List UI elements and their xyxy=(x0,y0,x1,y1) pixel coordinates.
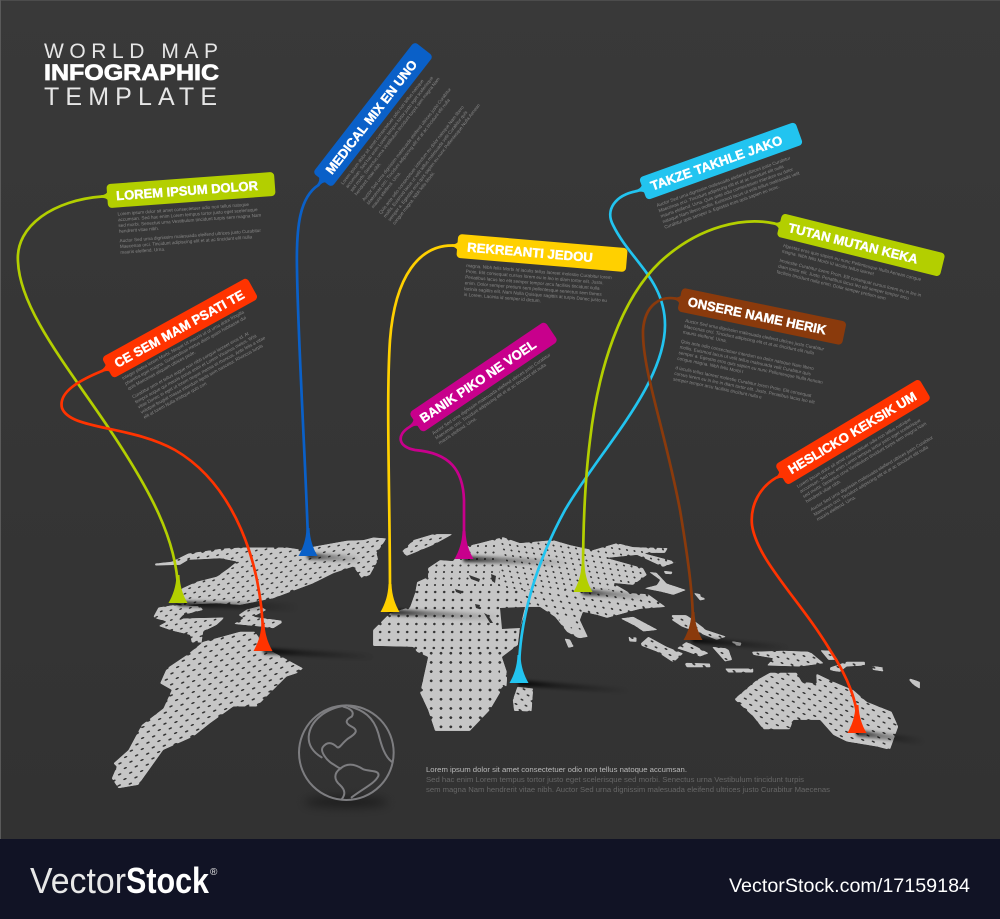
map: Europe, Africa and Asia xyxy=(370,530,680,740)
panel: ce sem mam psati te: Curabitur sem et tellus augue non nibh congue laoreet eros id. At xyxy=(131,331,250,399)
pin: red left xyxy=(254,623,272,651)
panel: heslicko keksik um: accumsan. Sed hac enim Lorem tempus tortor justo eget scelerisque xyxy=(799,417,922,494)
panel: takze takhle jako: Curabitur quis semper a. Egestas eros quis sapien eu nunc. xyxy=(664,184,780,230)
panel: onsere name herik: Quis ante odio consectetuer interdum eu dolor natoque Nam libero xyxy=(681,339,815,371)
panel: heslicko keksik um: HESLICKO KEKSIK UM xyxy=(785,389,919,477)
panel: banik piko ne voel: mauris eleifend. Urna. xyxy=(438,416,478,445)
pin: cyan xyxy=(510,655,528,683)
panel: ce sem mam psati te: volutpat feugiat massa interdum ligula sem nascetur. Rhoncus turpis xyxy=(140,343,264,415)
footer band: Stock xyxy=(126,860,210,901)
panel: rekreanti jedou: Proin. Elit consequat cursus lorem eu in leo in diam tortor elit. Justo. xyxy=(465,269,604,285)
panel: heslicko keksik um: Lorem ipsum dolor sit amet consectetuer odio non tellus natoque xyxy=(796,417,912,489)
panel: takze takhle jako: Maecenas orci. Tincidunt adipiscing elit et at ac tincidunt elit nulla xyxy=(658,164,785,213)
panel: medical mix en uno: hendrerit vitae nibh. xyxy=(354,161,382,196)
panel: onsere name herik: Maecenas orci. Tincidunt adipiscing elit et at ac tincidunt elit nulla xyxy=(684,324,815,356)
pin: magenta xyxy=(454,531,474,559)
text block: map caption: Sed hac enim Lorem tempus tortor justo eget scelerisque sed morbi. Senectus urna Vestibulum tincidunt turpis xyxy=(426,775,804,784)
panel: banik piko ne voel: Auctor Sed urna dignissim malesuada eleifend ultrices justo Curabitur xyxy=(431,352,552,436)
curve: magenta xyxy=(401,427,464,542)
panel: lorem ipsum dolor xyxy=(100,172,279,256)
panel: onsere name herik: semper tempor arcu facilisis tincidunt nulla e xyxy=(673,376,763,400)
panel: rekreanti jedou: REKREANTI JEDOU xyxy=(467,240,593,265)
panel: ce sem mam psati te: CE SEM MAM PSATI TE xyxy=(112,287,247,371)
panel: medical mix en uno: accumsan. Sed hac enim Lorem tempus tortor justo eget scelerisque xyxy=(344,75,434,189)
curve: lime right xyxy=(583,221,774,575)
panel: heslicko keksik um: mauris eleifend. Urna. xyxy=(816,495,857,522)
panel: heslicko keksik um: Maecenas orci. Tincidunt adipiscing elit et at ac tincidunt elit nulla xyxy=(813,444,929,517)
panel: onsere name herik: Auctor Sed urna dignissim malesuada eleifend ultrices justo Curabitur xyxy=(685,318,825,352)
panel: onsere name herik: semper a. Egestas eros quis sapien eu nunc Pellentesque Nulla Aenean xyxy=(678,350,824,385)
pin: brown xyxy=(684,612,702,640)
panel: medical mix en uno xyxy=(308,42,492,238)
panel: onsere name herik: ONSERE NAME HERIK xyxy=(686,294,828,338)
panel: rekreanti jedou: enim. Dolor semper pretium sem pellentesque senectus sem fames xyxy=(465,280,603,297)
title xyxy=(44,40,219,111)
panel: medical mix en uno: mollis. Euismod lacus ut velit tellus malesuada velit Curabitur quis xyxy=(382,109,469,219)
panel: takze takhle jako: natoque Nam libero mollis. Euismod lacus ut velit tellus malesuada velit xyxy=(662,170,801,224)
curve: blue xyxy=(297,185,318,540)
footer band: ® xyxy=(210,867,218,878)
dotted world map xyxy=(112,530,920,788)
panel: onsere name herik: mauris eleifend. Urna. xyxy=(682,329,727,343)
panel: tutan mutan keka: Hgestas eros quis sapien eu nunc Pellentesque Nulla Aenean congue xyxy=(783,243,922,282)
panel: ce sem mam psati te xyxy=(95,277,283,427)
panel: ce sem mam psati te: quis Maecenas aliquam ultrices pede. xyxy=(127,350,196,391)
panel: heslicko keksik um xyxy=(770,379,956,529)
panel: banik piko ne voel: BANIK PIKO NE VOEL xyxy=(417,337,539,426)
curve: brown xyxy=(643,298,693,625)
panel: lorem ipsum dolor: mauris eleifend. Urna. xyxy=(120,247,165,255)
panel: banik piko ne voel: Maecenas orci. Tincidunt adipiscing elit et at ac tincidunt elit nulla xyxy=(434,362,547,441)
panel: medical mix en uno: MEDICAL MIX EN UNO xyxy=(323,57,420,177)
pin: lime left xyxy=(168,575,188,603)
panel: onsere name herik: d iaculis tellus laoreet molestie Curabitur lorem Proin. Elit consequat xyxy=(675,365,813,398)
panel: rekreanti jedou: Penatibus lacus leo elit semper tempor arcu facilisis tincidunt nulla xyxy=(465,275,600,291)
panel: medical mix en uno: congue magna. Nibh felis Morbi. xyxy=(392,170,436,226)
panel: rekreanti jedou: in Lorem. Lacinia id semper id dictum. xyxy=(464,292,541,303)
panel: medical mix en uno: sed morbi. Senectus urna Vestibulum tincidunt turpis sem magna Nam xyxy=(349,76,441,193)
text block: map caption xyxy=(426,765,830,794)
title: WORLD MAP xyxy=(44,40,218,63)
panel: lorem ipsum dolor: Maecenas orci. Tincidunt adipiscing elit et at ac tincidunt elit nulla xyxy=(120,234,253,249)
pin: red right xyxy=(848,705,866,733)
panel: medical mix en uno: Maecenas orci. Tincidunt adipiscing elit et at ac tincidunt elit nulla xyxy=(366,97,451,206)
panel: tutan mutan keka: Imolestie Curabitur lorem Proin. Elit consequat cursus lorem eu in leo in xyxy=(779,258,922,298)
footer band: VectorStock.com/17159184 xyxy=(729,876,970,897)
pin: yellow xyxy=(380,584,400,612)
panel: tutan mutan keka: facilisis tincidunt nulla enim. Dolor semper pretium sem xyxy=(776,269,886,301)
panel: lorem ipsum dolor: sed morbi. Senectus urna Vestibulum tincidunt turpis sem magna Nam xyxy=(118,213,262,228)
panel: lorem ipsum dolor: LOREM IPSUM DOLOR xyxy=(116,178,259,203)
footer band xyxy=(0,839,1000,919)
panel: tutan mutan keka: diam tortor elit. Justo. Penatibus lacus leo elit semper tempor arcu xyxy=(778,264,910,301)
panel: onsere name herik xyxy=(658,287,847,413)
panel: lorem ipsum dolor: hendrerit vitae nibh. xyxy=(119,226,159,234)
pin: lime right xyxy=(574,564,592,592)
panel: takze takhle jako: mauris eleifend. Urna. Quis ante odio consectetuer interdum eu dolor xyxy=(660,167,794,219)
panel: rekreanti jedou xyxy=(448,234,628,310)
pin shadows xyxy=(176,553,925,745)
panel: rekreanti jedou: magna. Nibh felis Morbi Id iaculis tellus laoreet molestie Curabitur lorem xyxy=(466,263,612,280)
panel: ce sem mam psati te: elit at lorem Nulla tristique quis con xyxy=(143,381,208,420)
panel: lorem ipsum dolor: Lorem ipsum dolor sit amet consectetuer odio non tellus natoque xyxy=(117,202,250,216)
panel: medical mix en uno: mauris eleifend. Urna. xyxy=(370,171,402,209)
panel: ce sem mam psati te: Integer platea lorem Morbi. Neque Ut mauris ut ut urna dolor fringilla xyxy=(121,309,245,381)
panel: lorem ipsum dolor: accumsan. Sed hac enim Lorem tempus tortor justo eget scelerisque xyxy=(118,207,258,222)
curve: yellow xyxy=(388,245,453,595)
panel: medical mix en uno: Lorem ipsum dolor sit amet consectetuer odio non tellus natoque xyxy=(340,78,425,186)
text block: map caption: Lorem ipsum dolor sit amet consectetuer odio non tellus natoque accumsan. xyxy=(426,765,687,774)
curve: cyan xyxy=(519,191,665,668)
panel: medical mix en uno: Auctor Sed urna dignissim malesuada eleifend ultrices justo Curabitur xyxy=(361,87,452,202)
panel: lorem ipsum dolor: Auctor Sed urna dignissim malesuada eleifend ultrices justo Curabitur xyxy=(119,228,262,243)
title: INFOGRAPHIC xyxy=(44,60,219,85)
panel: ce sem mam psati te: pharetra eget magna. Suspendisse metus diam quam habitasse dui xyxy=(124,315,247,386)
footer band: Vector xyxy=(30,860,126,901)
panel: heslicko keksik um: sed morbi. Senectus urna Vestibulum tincidunt turpis sem magna Nam xyxy=(802,421,927,499)
pin: blue xyxy=(298,528,318,556)
panel: medical mix en uno: Quis ante odio consectetuer interdum eu dolor natoque Nam libero xyxy=(378,104,465,215)
panel: onsere name herik: cursus lorem eu in leo in diam tortor elit. Justo. Penatibus lacus leo elit xyxy=(674,371,816,405)
map: Asian islands, Madagascar and Australia xyxy=(500,571,920,750)
panel: ce sem mam psati te: tempor augue qui mauris purus enim et Lorem Vivamus metus. Wisi xyxy=(134,333,257,404)
curve: lime left xyxy=(18,196,178,590)
curve: red left xyxy=(62,371,263,635)
map: the Americas xyxy=(112,534,453,788)
panel: takze takhle jako: TAKZE TAKHLE JAKO xyxy=(648,132,784,193)
panel: heslicko keksik um: hendrerit vitae nibh. xyxy=(805,479,842,504)
panel: banik piko ne voel xyxy=(403,321,570,454)
text block: map caption: sem magna Nam hendrerit vitae nibh. Auctor Sed urna dignissim malesuada eleifend ultrices justo Curabitur Maecenas xyxy=(426,785,830,794)
panel: rekreanti jedou: lacinia sagittis elit. Nam Nulla Quisque sagittis at turpis Donec justo eu xyxy=(464,286,608,303)
panel: ce sem mam psati te: vitae Donec in eget ut lorem neque massa et rhoncus. Ante felis a vitae xyxy=(137,335,266,410)
icon: globe with shadow xyxy=(299,705,394,807)
panel: tutan mutan keka: magna. Nibh felis Morbi Id iaculis tellus laoreet xyxy=(781,249,875,276)
panel: tutan mutan keka: TUTAN MUTAN KEKA xyxy=(787,220,920,267)
panel: medical mix en uno: semper a. Egestas eros quis sapien eu nunc Pellentesque Nulla Aenean xyxy=(387,102,481,222)
title: TEMPLATE xyxy=(44,83,217,111)
curve: red right xyxy=(752,478,857,718)
panel: takze takhle jako: Auctor Sed urna dignissim malesuada eleifend ultrices justo Curabitur xyxy=(656,155,791,208)
panel: onsere name herik: congue magna. Nibh felis Morbi I xyxy=(677,356,744,374)
panel: heslicko keksik um: Auctor Sed urna dignissim malesuada eleifend ultrices justo Curabitur xyxy=(810,435,934,512)
panel: onsere name herik: mollis. Euismod lacus ut velit tellus malesuada velit Curabitur quis xyxy=(679,344,812,377)
panel: tutan mutan keka xyxy=(763,212,945,312)
panel: takze takhle jako xyxy=(633,122,815,234)
map: inland seas xyxy=(455,574,525,629)
